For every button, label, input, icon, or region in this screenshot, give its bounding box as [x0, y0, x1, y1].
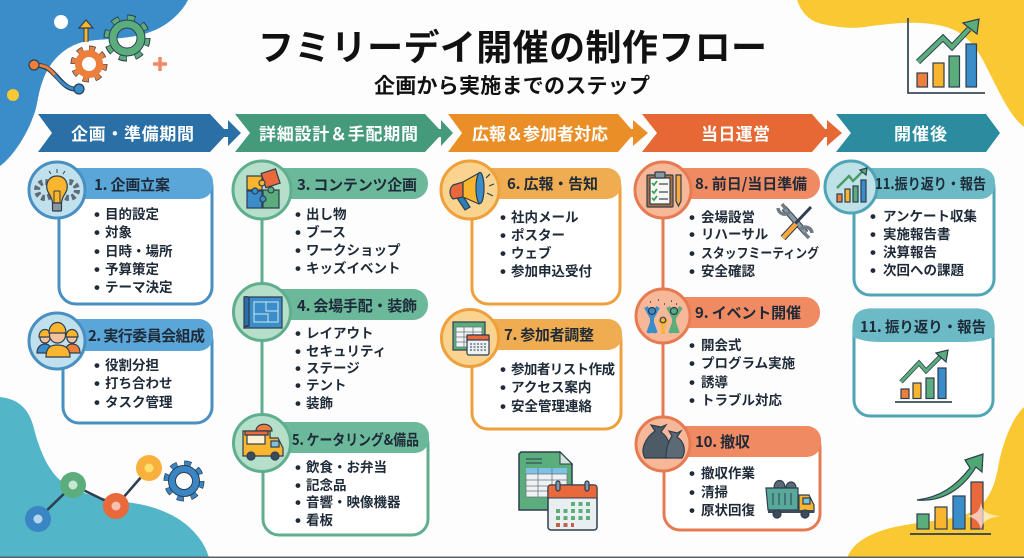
phase banner: 当日運営: [642, 114, 842, 152]
phase banner: 企画・準備期間: 企画・準備期間: [71, 124, 194, 144]
bullet list: •: [94, 260, 100, 279]
title text: 7. 参加者調整: [504, 324, 594, 345]
bullet list: 会場設営: [701, 209, 755, 225]
bullet list: 参加者リスト作成: [511, 361, 616, 377]
illustration: spreadsheet and calendar: [519, 452, 597, 530]
chart icon: bottom-right rising bars: [910, 454, 991, 534]
background blob: teal bottom-left: [0, 397, 209, 558]
title text: 11. 振り返り・報告: [860, 316, 986, 337]
bullet list: 社内メール: [511, 209, 579, 225]
bullet list: アンケート収集: [883, 208, 977, 224]
background blob: yellow bottom-right: [847, 407, 1024, 558]
bullet list: •: [295, 394, 301, 413]
connector: column 2 timeline: [260, 215, 264, 425]
bullet list: 実施報告書: [883, 226, 950, 242]
bullet list: キッズイベント: [306, 260, 400, 276]
bullet list: •: [689, 225, 695, 244]
bullet list: ブース: [306, 224, 346, 240]
icon: light bulb with gears: [29, 162, 85, 218]
bullet list: 飲食・お弁当: [306, 459, 387, 475]
bullet list: 出し物: [306, 206, 347, 222]
panel: 11. 振り返り・報告 (list): [825, 161, 995, 295]
title text: 4. 会場手配・装飾: [297, 295, 417, 316]
bullet list: テント: [306, 378, 346, 393]
bullet list: •: [94, 393, 100, 412]
bullet list: •: [689, 483, 695, 502]
bullet list: ステージ: [306, 361, 360, 376]
bullet list: •: [689, 208, 695, 227]
subtitle: 企画から実施までのステップ: [374, 75, 650, 98]
icon: sheet and calendar: [442, 310, 498, 366]
bullet list: •: [94, 205, 100, 224]
icon: garbage truck: [766, 480, 814, 518]
phase banner: 開催後: 開催後: [894, 124, 947, 144]
bullet list: •: [870, 243, 876, 262]
phase banner: 開催後: [836, 114, 1000, 152]
bullet list: •: [295, 476, 301, 495]
icon: garbage bags: [636, 417, 690, 471]
panel: 1. 企画立案: [29, 162, 213, 304]
icon: growth chart: [825, 161, 877, 213]
bullet list: 記念品: [306, 477, 346, 493]
bullet list: •: [500, 262, 506, 281]
bullet list: •: [295, 342, 301, 361]
icon: construction team: [29, 313, 85, 369]
bullet list: ウェブ: [511, 245, 552, 261]
bullet list: •: [689, 501, 695, 520]
title text: 8. 前日/当日準備: [695, 173, 807, 194]
phase banner: 企画・準備期間: [38, 114, 241, 152]
title text: 3. コンテンツ企画: [297, 174, 417, 195]
chart icon: top-right: [908, 18, 985, 93]
title text: 6. 広報・告知: [507, 173, 598, 194]
bullet list: •: [295, 259, 301, 278]
phase banner: 広報＆参加者対応: [448, 114, 648, 152]
decoration: node chain and gear: [25, 455, 200, 532]
bullet list: •: [500, 208, 506, 227]
bullet list: •: [295, 223, 301, 242]
bullet list: タスク管理: [105, 394, 173, 410]
bullet list: 誘導: [701, 374, 728, 390]
icon: blueprint: [234, 284, 290, 340]
icon: food truck: [234, 414, 290, 472]
phase banner: 詳細設計＆手配期間: 詳細設計＆手配期間: [259, 124, 418, 144]
bullet list: ワークショップ: [306, 243, 401, 258]
panel: 11. 振り返り・報告 (chart): [853, 309, 994, 416]
header: 10. 撤収: [663, 426, 821, 457]
phase banner: 詳細設計＆手配期間: [235, 114, 453, 152]
phase banner: 当日運営: 当日運営: [701, 125, 770, 144]
bullet list: 予算策定: [105, 261, 159, 277]
panel: 2. 実行委員会組成: [29, 313, 213, 423]
bullet list: ポスター: [511, 228, 565, 243]
bullet list: 安全確認: [701, 263, 755, 279]
bullet list: 打ち合わせ: [105, 375, 172, 391]
bullet list: •: [295, 359, 301, 378]
header: 6. 広報・告知: [470, 168, 621, 199]
title text: 11.振り返り・報告: [875, 173, 986, 194]
background blob: yellow top-right: [797, 0, 1024, 127]
bullet list: 清掃: [701, 484, 728, 500]
bullet list: 原状回復: [701, 502, 755, 518]
panel: 8. 前日/当日準備: [635, 162, 820, 281]
bullet list: •: [295, 324, 301, 343]
bullet list: 決算報告: [883, 244, 937, 260]
bullet list: •: [500, 244, 506, 263]
header: 1. 企画立案: [60, 168, 213, 199]
bullet list: 次回への課題: [883, 262, 964, 278]
bullet list: リハーサル: [701, 227, 769, 242]
bullet list: •: [295, 241, 301, 260]
bullet list: 撤収作業: [701, 465, 755, 481]
bullet list: トラブル対応: [701, 392, 782, 408]
bullet list: レイアウト: [306, 326, 374, 341]
icon: megaphone: [441, 161, 499, 219]
bullet list: •: [295, 493, 301, 512]
bullet list: [870, 207, 977, 280]
panel: 6. 広報・告知: [441, 161, 621, 304]
bullet list: 開会式: [701, 337, 742, 353]
bullet list: •: [500, 226, 506, 245]
bullet list: [689, 336, 796, 410]
header: 11. 振り返り・報告: [853, 309, 994, 342]
header: 2. 実行委員会組成: [60, 319, 213, 351]
phase banner: 広報＆参加者対応: 広報＆参加者対応: [472, 125, 608, 144]
bullet list: 音響・映像機器: [306, 494, 401, 510]
bullet list: 看板: [306, 513, 333, 528]
bullet list: テーマ決定: [105, 280, 173, 295]
bullet list: [94, 205, 173, 297]
bullet list: [295, 458, 401, 530]
title text: 2. 実行委員会組成: [88, 325, 205, 346]
panel: 5. ケータリング＆備品: [234, 414, 429, 535]
bullet list: 装飾: [306, 395, 333, 411]
bullet list: •: [689, 244, 695, 263]
bullet list: 参加申込受付: [511, 263, 592, 279]
title text: 1. 企画立案: [94, 174, 170, 195]
bullet list: スタッフミーティング: [701, 245, 819, 261]
header: 7. 参加者調整: [470, 319, 622, 350]
background blob: blue top-left: [0, 0, 188, 166]
icon: clipboard and pencil: [635, 162, 691, 218]
header: 9. イベント開催: [663, 297, 820, 328]
header: 4. 会場手配・装飾: [262, 289, 428, 320]
icon: wrench and screwdriver: [778, 204, 812, 238]
bullet list: [500, 208, 592, 281]
bullet list: •: [500, 378, 506, 397]
bullet list: •: [295, 458, 301, 477]
bullet list: •: [870, 207, 876, 226]
bullet list: 目的設定: [105, 206, 159, 222]
panel: 3. コンテンツ企画: [233, 161, 428, 278]
connector: column 4 timeline: [662, 215, 664, 430]
header: 8. 前日/当日準備: [663, 168, 820, 199]
bullet list: •: [500, 360, 506, 379]
icon: puzzle: [233, 161, 291, 219]
icon: people celebrating: [636, 289, 690, 343]
bullet list: •: [689, 391, 695, 410]
bullet list: [94, 356, 173, 412]
header: 3. コンテンツ企画: [262, 168, 428, 199]
panel: 4. 会場手配・装飾: [234, 284, 428, 413]
bullet list: •: [689, 336, 695, 355]
bullet list: •: [94, 278, 100, 297]
bullet list: •: [500, 397, 506, 416]
icon: growth chart: [895, 350, 952, 402]
bullet list: •: [295, 376, 301, 395]
title: フミリーデイ開催の制作フロー: [258, 27, 767, 68]
title text: 5. ケータリング&備品: [292, 429, 419, 450]
panel: 9. イベント開催: [636, 289, 820, 410]
bullet list: •: [94, 242, 100, 261]
header: 11.振り返り・報告: [850, 168, 995, 199]
title text: 9. イベント開催: [695, 302, 801, 323]
bullet list: [689, 208, 819, 281]
bullet list: [689, 464, 755, 520]
bullet list: •: [689, 354, 695, 373]
decoration: top-left gears and connector: [7, 15, 167, 101]
header: 5. ケータリング＆備品: [262, 422, 429, 453]
bullet list: •: [94, 356, 100, 375]
bullet list: •: [295, 205, 301, 224]
bullet list: [295, 205, 401, 278]
bullet list: •: [689, 262, 695, 281]
bullet list: アクセス案内: [511, 379, 591, 395]
bullet list: [500, 360, 616, 416]
bullet list: セキュリティ: [306, 344, 386, 359]
sparkle: [966, 502, 1001, 531]
bullet list: •: [94, 223, 100, 242]
bullet list: •: [295, 511, 301, 530]
bullet list: •: [94, 374, 100, 393]
bullet list: 対象: [105, 224, 132, 240]
bullet list: •: [689, 373, 695, 392]
bullet list: •: [870, 225, 876, 244]
bottom edge strip: [0, 556, 1024, 558]
title text: 10. 撤収: [695, 431, 750, 452]
bullet list: 日時・場所: [105, 243, 173, 259]
bullet list: 安全管理連絡: [511, 398, 592, 414]
bullet list: •: [870, 261, 876, 280]
bullet list: 役割分担: [105, 357, 159, 373]
bullet list: •: [689, 464, 695, 483]
bullet list: [295, 324, 386, 413]
bullet list: プログラム実施: [701, 355, 796, 371]
panel: 7. 参加者調整: [442, 310, 622, 429]
panel: 10. 撤収: [636, 417, 821, 530]
